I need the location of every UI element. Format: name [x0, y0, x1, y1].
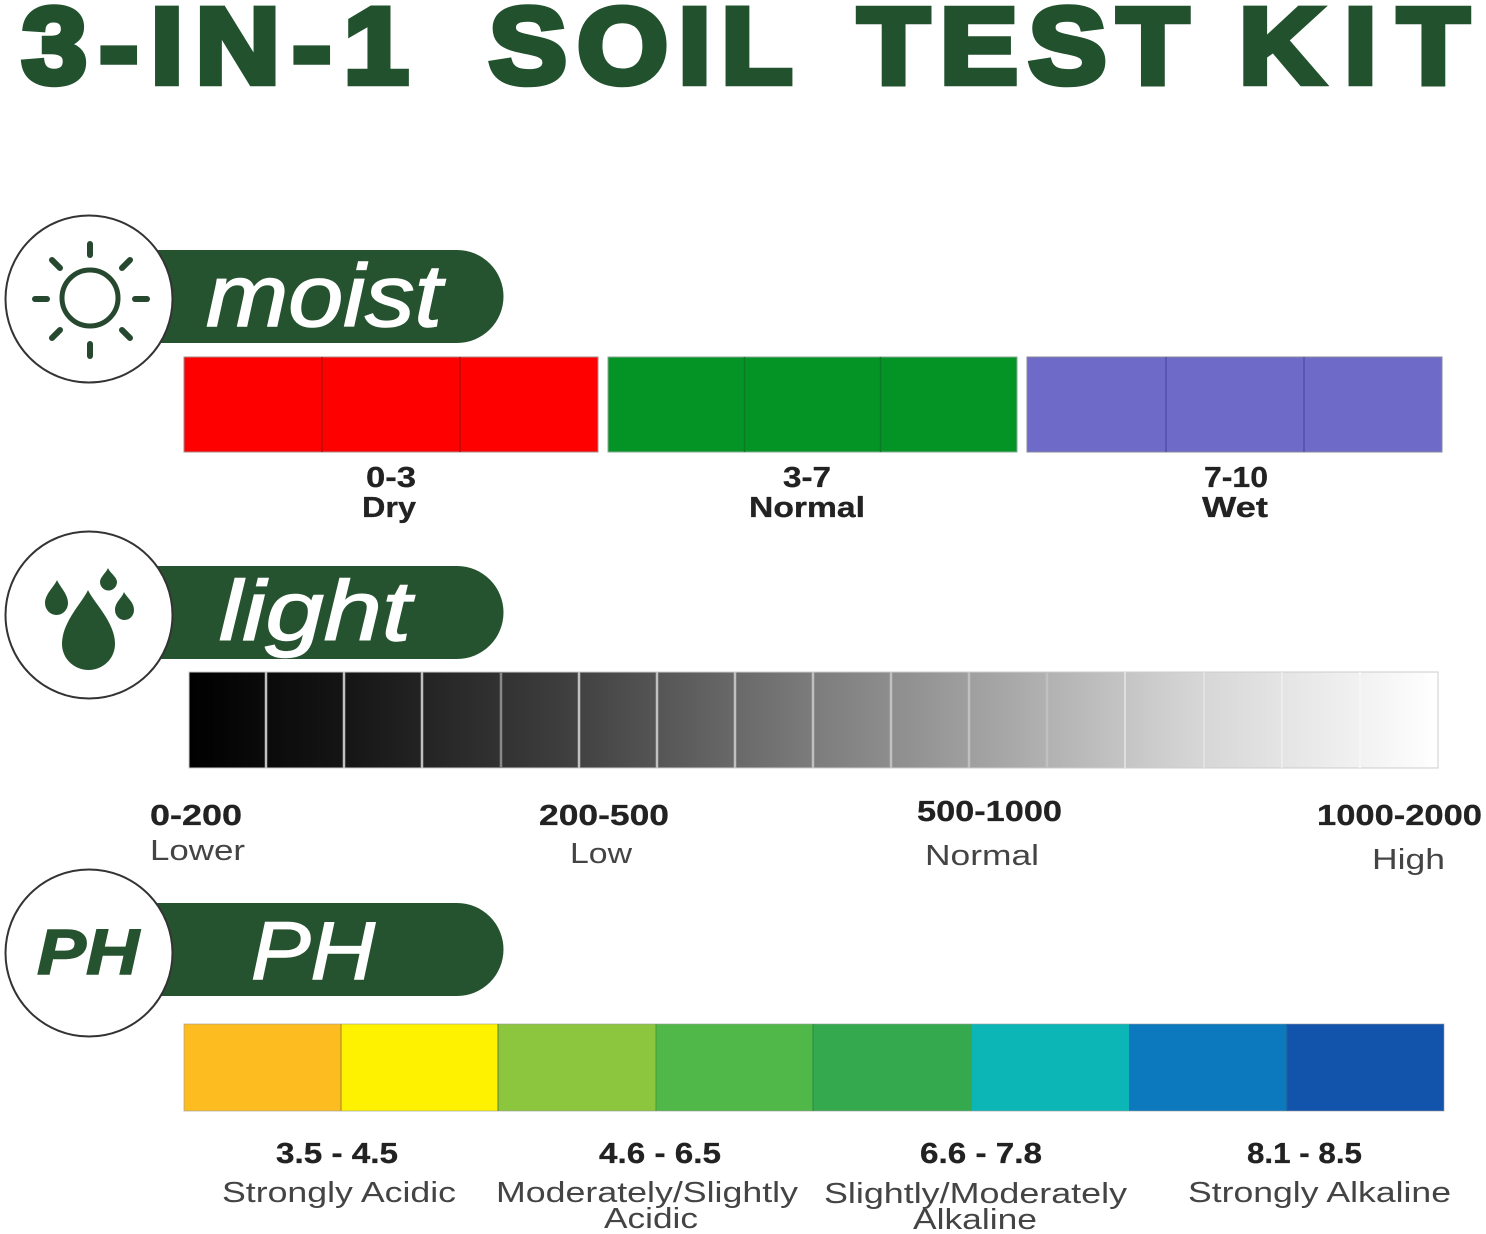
light label: lower: Lower [150, 835, 245, 867]
PH label pill [150, 903, 504, 997]
pH label: moderately alkaline [824, 1138, 1128, 1234]
icon: PH badge [6, 870, 172, 1036]
pH label: moderately alkaline: 6.6 - 7.8 [920, 1138, 1042, 1170]
pH label: strongly alkaline [1188, 1138, 1451, 1209]
title [22, 0, 1469, 106]
pH scale bar [184, 1024, 1444, 1111]
light label pill [150, 564, 504, 659]
moisture label: wet: 7-10 [1204, 462, 1268, 494]
panel: light [6, 532, 1482, 876]
moisture label: normal [749, 462, 865, 524]
moisture label: dry: Dry [362, 492, 416, 524]
pH label: moderately acidic: Moderately/Slightly [496, 1177, 799, 1209]
pH label: strongly acidic [222, 1138, 456, 1209]
moisture label: dry: 0-3 [366, 462, 416, 494]
light label: normal: 500-1000 [917, 796, 1062, 828]
light label: high: 1000-2000 [1317, 800, 1482, 832]
light label: high [1317, 800, 1482, 876]
light label: low: Low [570, 838, 633, 870]
icon: sun [6, 216, 172, 382]
moist label pill [150, 246, 504, 345]
icon: water drops [6, 532, 172, 698]
pH label: moderately alkaline: Slightly/Moderately [824, 1178, 1128, 1210]
light label: lower [150, 800, 245, 867]
moisture label: normal: Normal [749, 492, 865, 524]
light label: high: High [1372, 844, 1445, 876]
moisture label: normal: 3-7 [783, 462, 831, 494]
pH label: strongly acidic: 3.5 - 4.5 [276, 1138, 398, 1170]
light label: normal [917, 796, 1062, 872]
light scale bar [189, 672, 1438, 768]
light label: low: 200-500 [539, 800, 669, 832]
light label: lower: 0-200 [150, 800, 242, 832]
moisture scale bar [184, 357, 1442, 452]
moisture label: dry [362, 462, 416, 524]
light label pill: light [219, 564, 416, 658]
pH label: strongly alkaline: Strongly Alkaline [1188, 1177, 1451, 1209]
light label: low [539, 800, 669, 870]
pH label: moderately acidic [496, 1138, 799, 1234]
panel: moist [6, 216, 1442, 524]
pH label: strongly acidic: Strongly Acidic [222, 1177, 456, 1209]
pH label: strongly alkaline: 8.1 - 8.5 [1247, 1138, 1362, 1170]
moisture label: wet [1202, 462, 1268, 524]
moisture label: wet: Wet [1202, 492, 1268, 524]
panel: PH [6, 870, 1451, 1234]
icon: PH badge: PH [37, 916, 141, 988]
pH label: moderately acidic: 4.6 - 6.5 [599, 1138, 721, 1170]
moist label pill: moist [206, 246, 446, 345]
PH label pill: PH [251, 906, 376, 997]
light label: normal: Normal [925, 840, 1039, 872]
